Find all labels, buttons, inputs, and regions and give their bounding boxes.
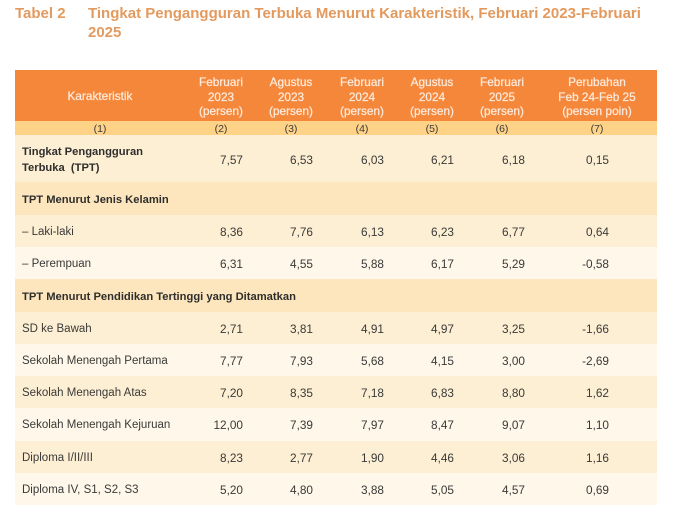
table header row: Februari (199, 75, 243, 89)
row: Diploma IV, S1, S2, S3 (15, 473, 657, 505)
row: SMK: 9,07 (502, 418, 525, 432)
section: pendidikan: TPT Menurut Pendidikan Tertinggi yang Ditamatkan (22, 291, 296, 303)
table header row: (persen) (480, 104, 524, 118)
row: Diploma I/II/III: 1,90 (361, 451, 384, 465)
row: SMA: 8,80 (502, 386, 525, 400)
row: SMK: 8,47 (431, 418, 454, 432)
row: SD ke Bawah: 3,81 (290, 322, 313, 336)
title text: 2025 (88, 24, 121, 41)
title text: Tingkat Pengangguran Terbuka Menurut Karakteristik, Februari 2023-Februari (88, 5, 641, 22)
row: SMK (15, 408, 657, 441)
column number row: (6) (496, 123, 508, 135)
table header row: 2023 (278, 90, 304, 104)
row: laki-laki: – Laki-laki (22, 226, 74, 238)
row: laki-laki: 6,13 (361, 225, 384, 239)
row: SMP: Sekolah Menengah Pertama (22, 355, 168, 367)
column number row: (3) (285, 123, 297, 135)
row: SMK: Sekolah Menengah Kejuruan (22, 419, 170, 431)
row: TPT: 6,18 (502, 153, 525, 167)
row: SMP: 4,15 (431, 354, 454, 368)
row: Diploma I/II/III (15, 441, 657, 473)
table header row: 2024 (419, 90, 445, 104)
row: TPT: Tingkat Pengangguran (22, 146, 143, 158)
row: laki-laki: 8,36 (220, 225, 243, 239)
row: SMP (15, 344, 657, 376)
row: Diploma IV, S1, S2, S3: 4,57 (502, 483, 525, 497)
section: jenis kelamin (15, 182, 657, 215)
section: pendidikan (15, 279, 657, 312)
row: laki-laki: 7,76 (290, 225, 313, 239)
row: Diploma IV, S1, S2, S3: 5,20 (220, 483, 243, 497)
table header row: 2025 (489, 90, 515, 104)
table header row: (persen) (410, 104, 454, 118)
row: SMA: 8,35 (290, 386, 313, 400)
table header row: 2024 (349, 90, 375, 104)
row: TPT: 6,03 (361, 153, 384, 167)
column number row: (5) (426, 123, 438, 135)
column number row: (7) (591, 123, 603, 135)
table header row: 2023 (208, 90, 234, 104)
row: Diploma IV, S1, S2, S3: 3,88 (361, 483, 384, 497)
row: SMK: 12,00 (213, 418, 243, 432)
row: perempuan: 5,88 (361, 257, 384, 271)
row: Diploma I/II/III: 2,77 (290, 451, 313, 465)
column number row: (4) (356, 123, 368, 135)
row: TPT: 6,21 (431, 153, 454, 167)
row: SD ke Bawah: SD ke Bawah (22, 323, 92, 335)
row: laki-laki: 6,77 (502, 225, 525, 239)
table header row: Februari (480, 75, 524, 89)
row: SMP: -2,69 (582, 354, 609, 368)
table header row: (persen) (199, 104, 243, 118)
table header row: Agustus (411, 75, 453, 89)
row: Diploma IV, S1, S2, S3: 5,05 (431, 483, 454, 497)
row: Diploma IV, S1, S2, S3: Diploma IV, S1, S2, S3 (22, 484, 139, 496)
row: Diploma IV, S1, S2, S3: 4,80 (290, 483, 313, 497)
table header row: (persen) (340, 104, 384, 118)
row: Diploma I/II/III: 3,06 (502, 451, 525, 465)
row: SD ke Bawah: 2,71 (220, 322, 243, 336)
row: SMA: 1,62 (586, 386, 609, 400)
row: perempuan: 6,31 (220, 257, 243, 271)
row: Diploma IV, S1, S2, S3: 0,69 (586, 483, 609, 497)
table header row: (persen) (269, 104, 313, 118)
row: perempuan: 4,55 (290, 257, 313, 271)
row: perempuan: 6,17 (431, 257, 454, 271)
row: SMA: 7,20 (220, 386, 243, 400)
table header row (15, 70, 657, 121)
table header row: Feb 24-Feb 25 (558, 90, 636, 104)
row: perempuan: 5,29 (502, 257, 525, 271)
row: TPT: 7,57 (220, 153, 243, 167)
row: SD ke Bawah (15, 312, 657, 344)
column number row: (2) (215, 123, 227, 135)
row: SD ke Bawah: -1,66 (582, 322, 609, 336)
row: perempuan: -0,58 (582, 257, 609, 271)
table header row: Agustus (270, 75, 312, 89)
row: TPT (15, 135, 657, 182)
table header row: (persen poin) (562, 104, 632, 118)
row: perempuan (15, 247, 657, 279)
table header row: Karakteristik (68, 89, 132, 103)
row: SMA (15, 376, 657, 408)
row: TPT: 6,53 (290, 153, 313, 167)
row: SMP: 7,93 (290, 354, 313, 368)
row: Diploma I/II/III: 4,46 (431, 451, 454, 465)
table header row: Februari (340, 75, 384, 89)
row: SD ke Bawah: 3,25 (502, 322, 525, 336)
row: laki-laki: 6,23 (431, 225, 454, 239)
section: jenis kelamin: TPT Menurut Jenis Kelamin (22, 194, 169, 206)
row: laki-laki: 0,64 (586, 225, 609, 239)
row: SMP: 5,68 (361, 354, 384, 368)
row: TPT: 0,15 (586, 153, 609, 167)
row: SMP: 3,00 (502, 354, 525, 368)
row: SMK: 1,10 (586, 418, 609, 432)
row: Diploma I/II/III: 1,16 (586, 451, 609, 465)
table header row: Perubahan (568, 75, 626, 89)
row: Diploma I/II/III: Diploma I/II/III (22, 452, 93, 464)
row: SD ke Bawah: 4,91 (361, 322, 384, 336)
row: Diploma I/II/III: 8,23 (220, 451, 243, 465)
row: SMA: 7,18 (361, 386, 384, 400)
row: perempuan: – Perempuan (22, 258, 91, 270)
row: TPT: Terbuka (TPT) (22, 162, 100, 174)
title text (88, 5, 641, 41)
row: SMP: 7,77 (220, 354, 243, 368)
row: SD ke Bawah: 4,97 (431, 322, 454, 336)
column number row: (1) (94, 123, 106, 135)
column number row (15, 121, 657, 135)
row: SMA: 6,83 (431, 386, 454, 400)
row: laki-laki (15, 215, 657, 247)
row: SMK: 7,39 (290, 418, 313, 432)
row: SMA: Sekolah Menengah Atas (22, 387, 147, 399)
row: SMK: 7,97 (361, 418, 384, 432)
title label: Tabel 2 (15, 5, 66, 22)
